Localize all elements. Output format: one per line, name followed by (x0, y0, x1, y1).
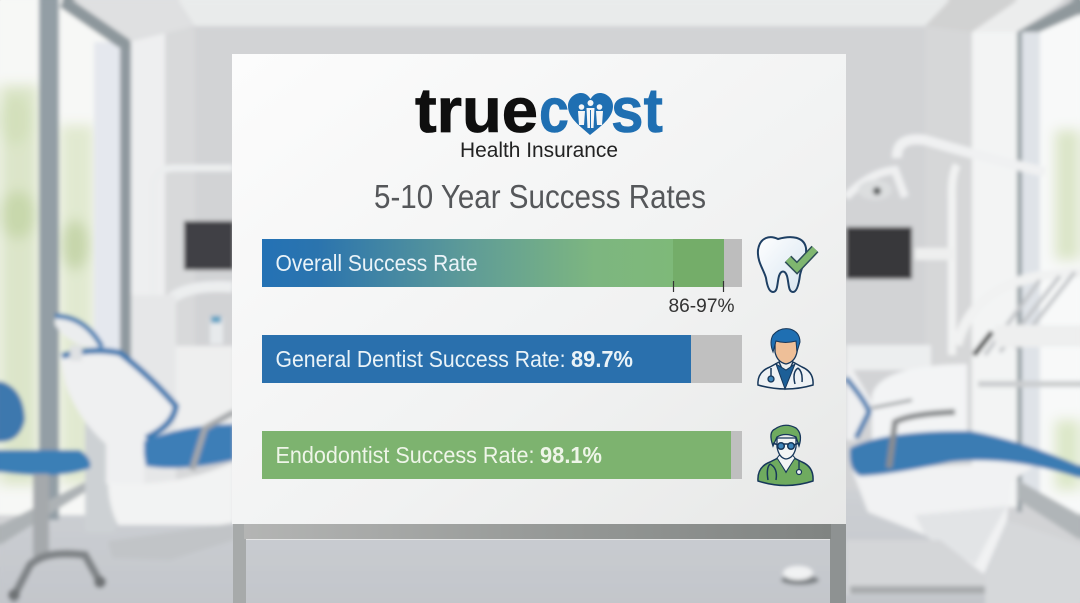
left dental chair: headrest (55, 317, 101, 348)
bar label: Endodontist Success Rate: (276, 442, 534, 468)
icon: endodontist (758, 425, 813, 486)
left dental chair: pedestal (85, 420, 115, 532)
logo word: true: true (415, 76, 538, 146)
bar track (262, 335, 742, 383)
logo word: c: c (539, 76, 569, 146)
bar fill (262, 335, 691, 383)
logo tagline: Health Insurance (460, 139, 618, 162)
stool (0, 381, 25, 442)
bar value: 98.1% (540, 442, 602, 468)
foot pedal (781, 575, 819, 585)
right side wall (925, 26, 973, 506)
left dental arm (153, 168, 233, 300)
right dental chair: basin and body (846, 345, 931, 370)
panel: white sign (232, 54, 846, 524)
logo: truecost Health Insurance (415, 76, 663, 162)
left dental chair: seat (142, 424, 234, 468)
right leg (830, 524, 846, 603)
behind chair wall area (131, 295, 176, 495)
left dental chair: backrest (60, 350, 176, 446)
bar: overall success rate (262, 239, 742, 317)
bar fill (262, 431, 731, 479)
right monitor (846, 227, 912, 279)
bar value: 89.7% (571, 346, 633, 372)
bar track (262, 431, 742, 479)
range ticks (674, 281, 724, 292)
bar label: General Dentist Success Rate: (276, 346, 566, 372)
right instrument tray (957, 272, 1080, 345)
icon: general dentist (758, 329, 813, 389)
right dental chair: seat (850, 431, 1080, 478)
logo heart icon with family (568, 93, 613, 135)
logo word: st: st (611, 76, 663, 146)
title: 5-10 Year Success Rates (374, 178, 706, 215)
bar: endodontist success rate (262, 431, 742, 479)
left leg (233, 524, 246, 603)
floor (0, 490, 1080, 603)
icon: tooth with check mark (758, 237, 815, 292)
right window (972, 32, 1018, 507)
sign stand (233, 524, 846, 603)
right dental chair: base (852, 462, 1040, 577)
left window (0, 0, 130, 515)
range label: 86-97% (668, 295, 734, 317)
bar: general dentist success rate (262, 335, 742, 383)
bar label: Overall Success Rate (276, 250, 478, 276)
ceiling (178, 0, 950, 26)
crossbar (244, 524, 831, 539)
bar track (262, 239, 742, 287)
bar fill gradient (262, 239, 724, 287)
range highlight 86-97% (673, 239, 724, 287)
left monitor (184, 221, 234, 270)
left cabinet (176, 346, 234, 446)
left side wall (130, 30, 166, 500)
right dental arm (897, 139, 1045, 172)
